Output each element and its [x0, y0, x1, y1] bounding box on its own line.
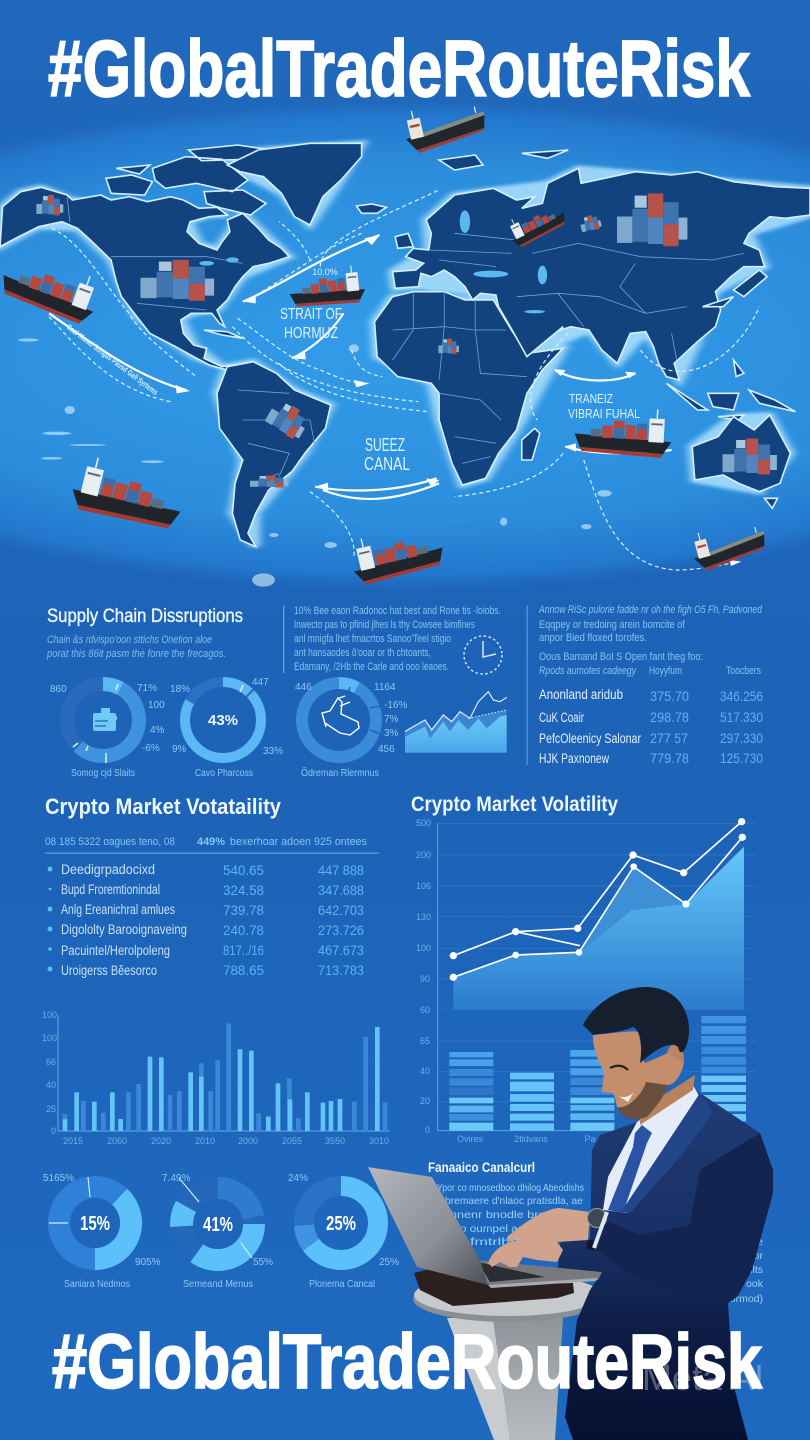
stacked bar 1 — [449, 1052, 493, 1131]
containers: north america — [140, 260, 214, 301]
text block: ant hansaodes ô'ooar or th chtoants, — [294, 647, 431, 659]
scattered islands — [18, 338, 612, 587]
donut labels: Saniara Nedmos — [64, 1279, 130, 1290]
Australia — [692, 415, 790, 508]
bar chart: yearly — [42, 1010, 390, 1146]
table rows: Deedigrpadocixd — [61, 862, 155, 877]
table rows: 467.673 — [318, 942, 364, 958]
cuff — [594, 1212, 607, 1248]
table rows: 739.78 — [223, 902, 264, 918]
landmasses — [0, 143, 810, 547]
table rows: Pacuintel/Herolpoleng — [61, 943, 170, 958]
shirt — [603, 1085, 700, 1213]
table rows: 779.78 — [650, 750, 689, 766]
donut: somog slaits — [67, 684, 139, 763]
heading: Fanaaico Canalcurl — [428, 1159, 535, 1175]
tie — [608, 1125, 652, 1213]
axis labels: 60 — [420, 1005, 430, 1015]
axis labels: 90 — [420, 974, 430, 984]
table rows: 517.330 — [720, 709, 763, 725]
book — [414, 1268, 574, 1306]
axis labels: 0 — [425, 1125, 430, 1135]
stacked bar 3 — [570, 1050, 614, 1131]
map label: suez canal: CANAL — [364, 454, 410, 474]
pedestal — [447, 1318, 563, 1440]
ship: indian ocean — [574, 405, 673, 458]
area — [453, 847, 744, 1009]
icon: container case — [93, 708, 117, 731]
donut: 43%: 43% — [208, 712, 238, 729]
donut value labels: -6% — [142, 743, 160, 754]
axis labels: 100 — [42, 1010, 57, 1020]
world map — [0, 143, 810, 587]
table rows: 347.688 — [318, 882, 364, 898]
donut: 25%: 25% — [326, 1213, 356, 1235]
suit body — [558, 1093, 773, 1440]
neck — [640, 1075, 695, 1125]
axis labels: 40 — [46, 1080, 56, 1090]
text block: Edamany, /2Hb the Carle and ooo leaoes. — [294, 661, 449, 673]
donut value labels: 447 — [252, 677, 269, 688]
axis labels: 20 — [420, 1096, 430, 1106]
solid route arcs — [49, 235, 672, 499]
axis labels: 106 — [416, 881, 431, 891]
donut value labels: 860 — [50, 684, 67, 695]
grid — [438, 823, 756, 1131]
map label: strait of hormuz: STRAIT OF — [280, 306, 342, 323]
containers: asia small — [579, 213, 602, 233]
table rows: 447 888 — [318, 862, 364, 878]
description — [46, 634, 226, 660]
table rows: 540.65 — [223, 862, 264, 878]
table rows: 277 57 — [650, 730, 688, 746]
table rows: 298.78 — [650, 709, 689, 725]
panel: middle text column — [283, 605, 507, 753]
Madagascar — [522, 428, 540, 460]
table rows: Anlg Ereanichral amlues — [61, 902, 175, 917]
axis labels — [42, 1010, 389, 1146]
text block: Toocbers — [726, 665, 761, 677]
axis labels: 2010 — [195, 1136, 215, 1146]
dashed routes — [49, 190, 759, 570]
axis labels: 66 — [46, 1057, 56, 1067]
axis labels: Pa — [584, 1134, 596, 1144]
donut captions — [71, 766, 379, 779]
donut value labels: 4% — [150, 725, 165, 736]
donut value labels: 9% — [172, 744, 187, 755]
South America — [217, 362, 331, 547]
Greenland — [227, 143, 362, 225]
axis labels: 100 — [416, 943, 431, 953]
ship: west pacific — [0, 248, 104, 327]
description: porat this 86it pasm the fonre the frecagos. — [46, 648, 226, 660]
heading: Crypto Market Volatility — [411, 793, 618, 816]
donut labels — [43, 1173, 399, 1290]
sleeve — [596, 1133, 773, 1300]
table rows: Anonland aridub — [539, 687, 623, 702]
map label: strait of hormuz: 10.0% — [312, 267, 338, 277]
containers: brazil — [264, 397, 311, 442]
table rows: 346.256 — [720, 688, 763, 704]
body text: s ook — [738, 1278, 764, 1290]
panel: supply chain disruptions — [46, 606, 407, 779]
donut value labels: 7% — [384, 714, 399, 725]
map label: traffic: TRANEIZ — [569, 391, 613, 406]
Europe and Asia islands — [395, 150, 796, 420]
table rows — [61, 862, 364, 978]
body text: Ypor co mnosedboo dhilog Abeodishs — [437, 1182, 584, 1194]
text block: anpor Bied floxed torofes. — [539, 632, 647, 644]
donut: ship icon — [302, 683, 381, 757]
ear — [666, 1044, 684, 1076]
table rows: 125.730 — [720, 750, 763, 766]
icon: ship outline — [322, 696, 359, 735]
donut value labels: 71% — [137, 683, 157, 694]
Arctic islands — [106, 145, 271, 215]
axes and grid — [58, 1015, 390, 1131]
donut: 25% — [304, 1186, 378, 1260]
ship: mid atlantic — [287, 264, 366, 309]
containers: argentina — [250, 476, 288, 488]
table rows: 324.58 — [223, 882, 264, 898]
text block: anl mnigfa lhet fmacrtos Sanoo'Teel stigio — [294, 633, 451, 645]
inland seas — [199, 210, 547, 313]
Iceland — [356, 204, 386, 213]
axis labels: 2000 — [238, 1136, 258, 1146]
body text: o oumpel aes — [460, 1223, 530, 1235]
description: Chain &s rdvispo'oon sttichs Onetion aloe — [47, 634, 212, 646]
map label: suez canal — [364, 435, 410, 474]
mouth — [617, 1092, 634, 1102]
donut value labels: 446 — [295, 682, 312, 693]
containers: africa — [438, 339, 459, 354]
panel: right table — [526, 604, 763, 766]
donut labels: 55% — [253, 1257, 273, 1268]
axis labels — [416, 818, 596, 1144]
ship: south pacific — [68, 453, 188, 534]
table header: bexerhoar adoen 925 ontees — [230, 836, 367, 848]
beard — [617, 1082, 668, 1119]
ocean glow behind map — [0, 95, 810, 595]
donut labels: 7.49% — [162, 1173, 190, 1184]
table rows: Uroigerss Bĕesorco — [61, 963, 157, 978]
axis labels: 2055 — [282, 1136, 302, 1146]
axis labels: 2015 — [63, 1136, 83, 1146]
body text — [437, 1182, 764, 1305]
keyboard — [478, 1262, 545, 1282]
borders — [67, 197, 744, 483]
donut labels: 905% — [135, 1257, 161, 1268]
panel: bottom donuts — [43, 1173, 399, 1290]
table rows: 642.703 — [318, 902, 364, 918]
table header: 449% — [197, 836, 225, 848]
ship: north atlantic top — [400, 95, 490, 155]
Eurasia — [393, 168, 810, 380]
watch — [586, 1208, 606, 1251]
donut value labels: 3% — [384, 728, 399, 739]
lines — [453, 822, 742, 977]
axis labels: 100 — [42, 1033, 57, 1043]
donut captions: Somog cjd Slaits — [71, 768, 135, 779]
panel: crypto market table — [45, 794, 379, 978]
table rows: CuK Coair — [539, 710, 584, 725]
table rows: 817../16 — [223, 942, 264, 958]
donut captions: Ǒdreman Rlermnus — [301, 766, 379, 779]
donut captions: Cavo Pharcoss — [195, 768, 253, 779]
body text: ults — [747, 1264, 763, 1276]
laptop — [368, 1167, 602, 1306]
head — [583, 987, 695, 1125]
icon: clock — [464, 636, 502, 674]
containers: australia — [722, 438, 777, 474]
table rows — [539, 687, 763, 766]
panel: crypto market chart — [411, 793, 756, 1144]
table rows: 273.726 — [318, 922, 364, 938]
axis labels: 3550 — [325, 1136, 345, 1146]
axis labels: 2tldvans — [514, 1134, 548, 1144]
panel: panama canal text — [428, 1159, 764, 1305]
axis labels: 130 — [416, 912, 431, 922]
text block — [294, 605, 501, 673]
land glow — [0, 143, 810, 547]
hair — [583, 987, 689, 1063]
axis labels: 0 — [51, 1126, 56, 1136]
text block: Oous Bamand BoI S Open fant theg foo: — [539, 651, 703, 663]
axis labels: Ovires — [457, 1134, 483, 1144]
route arrowheads — [176, 235, 741, 566]
face — [593, 1031, 683, 1118]
axis labels: 65 — [420, 1036, 430, 1046]
combined chart — [438, 818, 756, 1131]
text block: Hoyyfum — [649, 665, 682, 677]
table rows: Digololty Barooignaveing — [61, 922, 187, 937]
ship: south atlantic — [347, 521, 447, 587]
donut: 15% — [49, 1177, 131, 1259]
axis labels: 25 — [46, 1104, 56, 1114]
axis labels: 2020 — [151, 1136, 171, 1146]
Caribbean — [204, 330, 243, 338]
text block: Eqqpey or tredoing arein bomcite of — [539, 619, 686, 631]
donut: 41%: 41% — [203, 1214, 233, 1236]
laptop lid — [368, 1167, 488, 1285]
donut value labels: -16% — [384, 700, 407, 711]
watermark: Meta AI — [642, 1357, 764, 1398]
heading: Crypto Market Votataility — [45, 794, 282, 819]
stacked bar 2 — [510, 1073, 554, 1131]
ship: russia — [503, 197, 569, 250]
map label: traffic — [568, 391, 640, 421]
axis labels: 2060 — [107, 1136, 127, 1146]
map label: suez canal: SUEEZ — [365, 435, 405, 455]
body text: fmtrlhrt — [470, 1236, 520, 1248]
map label: slanted route text: Gaal Marad Sungas Pausd Gall Syrtems — [65, 322, 160, 397]
eye — [610, 1066, 628, 1070]
donut: 41% — [179, 1178, 254, 1260]
heading: Supply Chain Dissruptions — [47, 606, 243, 627]
donut value labels: 18% — [170, 684, 190, 695]
donut labels: 5165% — [43, 1173, 74, 1184]
body text: hnenr bnodle bren ae — [450, 1209, 570, 1221]
lapel — [621, 1093, 713, 1213]
body text: or — [754, 1250, 763, 1262]
axis labels: 500 — [416, 818, 431, 828]
table rows: PefcOleenicy Salonar — [539, 731, 641, 746]
donut: 15%: 15% — [80, 1213, 110, 1235]
donut value labels: 456 — [378, 744, 395, 755]
donut value labels: 100 — [148, 700, 165, 711]
map label: strait of hormuz — [280, 267, 342, 342]
map label: strait of hormuz: HORMUZ — [284, 325, 338, 342]
table bullets — [48, 867, 52, 971]
donut labels: 25% — [379, 1257, 399, 1268]
table header: 08 185 5322 oagues teno, 08 — [45, 836, 175, 848]
body text: bremaere d'nlaoc pratisdla, ae — [445, 1195, 583, 1207]
table rows: 375.70 — [650, 688, 689, 704]
Africa — [375, 292, 563, 485]
body text: e — [757, 1236, 763, 1248]
ship: south east — [688, 517, 770, 573]
donut labels: Plonema Cancal — [309, 1279, 375, 1290]
donut value labels: 33% — [263, 746, 283, 757]
body text: formod) — [727, 1293, 763, 1305]
donut labels: Semeand Menus — [183, 1279, 253, 1290]
text block: 10% Bee eaon Radonoc hat best and Rone tis -loiobs. — [294, 605, 501, 617]
text block — [538, 604, 763, 677]
donut value labels: 1164 — [374, 682, 396, 693]
table rows: 240.78 — [223, 922, 264, 938]
laptop base — [477, 1260, 602, 1285]
containers: russia — [617, 193, 687, 246]
table rows: 713.783 — [318, 962, 364, 978]
businessman with laptop — [368, 987, 773, 1440]
stacked bar 4 — [701, 1016, 746, 1131]
map label: traffic: VIBRAI FUHAL — [568, 406, 640, 421]
North America — [0, 187, 289, 370]
table rows: HJK Paxnonew — [539, 751, 609, 766]
table rows: Bupd Froremtionindal — [61, 882, 160, 897]
text block: Rpods aumotes cadeegy — [539, 665, 637, 677]
donut: 43% — [185, 682, 261, 758]
table top — [413, 1274, 603, 1322]
table rows: 788.65 — [223, 962, 264, 978]
axis labels: 3010 — [369, 1136, 389, 1146]
text block: Inwecto pas to pfinid jlhes ls thy Cowsee bimfines — [294, 619, 475, 631]
axis labels: 200 — [416, 850, 431, 860]
hand — [488, 1208, 590, 1267]
donut value labels — [50, 677, 407, 757]
line points — [450, 818, 746, 981]
donut labels: 24% — [288, 1173, 308, 1184]
bars — [63, 1023, 387, 1131]
area sparkline — [405, 692, 507, 753]
table header — [45, 836, 367, 848]
containers: alaska — [36, 195, 63, 215]
table rows: 297.330 — [720, 730, 763, 746]
axis labels: 40 — [420, 1066, 430, 1076]
